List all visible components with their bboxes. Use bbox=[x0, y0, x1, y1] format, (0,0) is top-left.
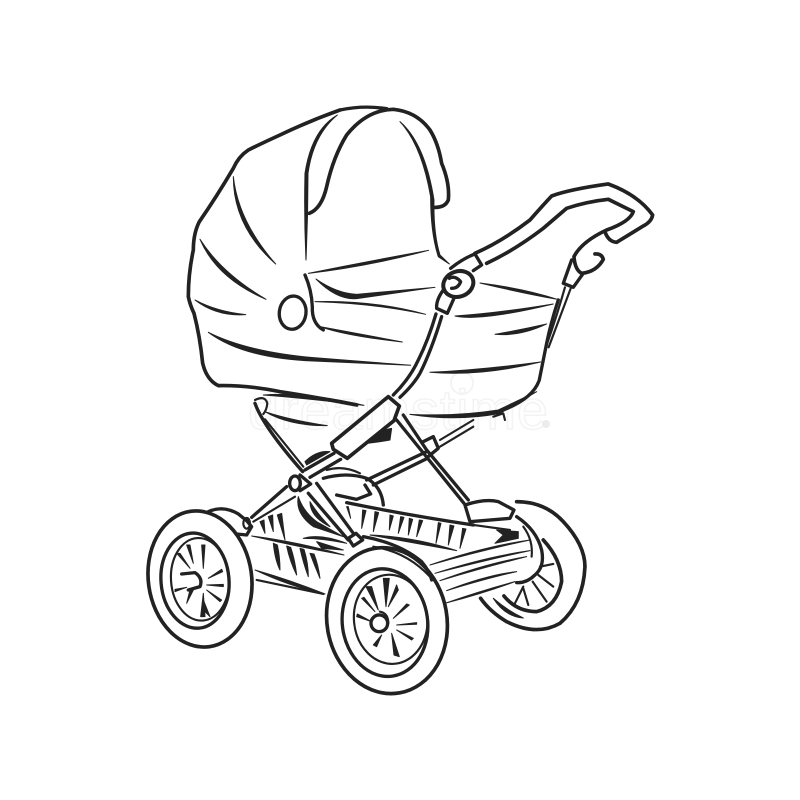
left wheel spokes bbox=[175, 545, 223, 617]
canopy folds bbox=[195, 177, 411, 365]
handle joint bbox=[437, 254, 482, 313]
hood seam bbox=[305, 115, 337, 260]
left fold clip bbox=[243, 497, 363, 550]
hood front arch bbox=[309, 109, 449, 213]
bassinet outer outline bbox=[188, 110, 357, 405]
front fender bbox=[363, 537, 432, 580]
push handle bbox=[475, 184, 653, 347]
right front wheel bbox=[315, 538, 459, 703]
right wheel spokes bbox=[357, 578, 417, 657]
basket bbox=[347, 503, 518, 551]
left side rail bbox=[252, 513, 344, 594]
chassis and wheels bbox=[139, 392, 585, 703]
seat bar handle bbox=[332, 397, 399, 458]
bassinet underside bbox=[255, 392, 537, 426]
hood top edge bbox=[340, 107, 387, 110]
bassinet folds bbox=[305, 250, 557, 373]
scissor frame bbox=[252, 403, 473, 540]
left fender bbox=[208, 509, 252, 535]
hood inner edge bbox=[400, 122, 449, 264]
rear wheel bbox=[481, 502, 585, 630]
canopy button bbox=[277, 294, 308, 331]
left wheel hub bbox=[182, 573, 201, 590]
bassinet right side bbox=[503, 300, 558, 410]
right wheel hub bbox=[371, 615, 388, 632]
footrest bbox=[465, 501, 514, 522]
right side rail bbox=[430, 517, 542, 603]
bassinet and hood bbox=[188, 107, 653, 410]
watermark: dreamstime bbox=[248, 378, 548, 441]
support arm bbox=[393, 314, 442, 397]
left front wheel bbox=[139, 504, 261, 654]
